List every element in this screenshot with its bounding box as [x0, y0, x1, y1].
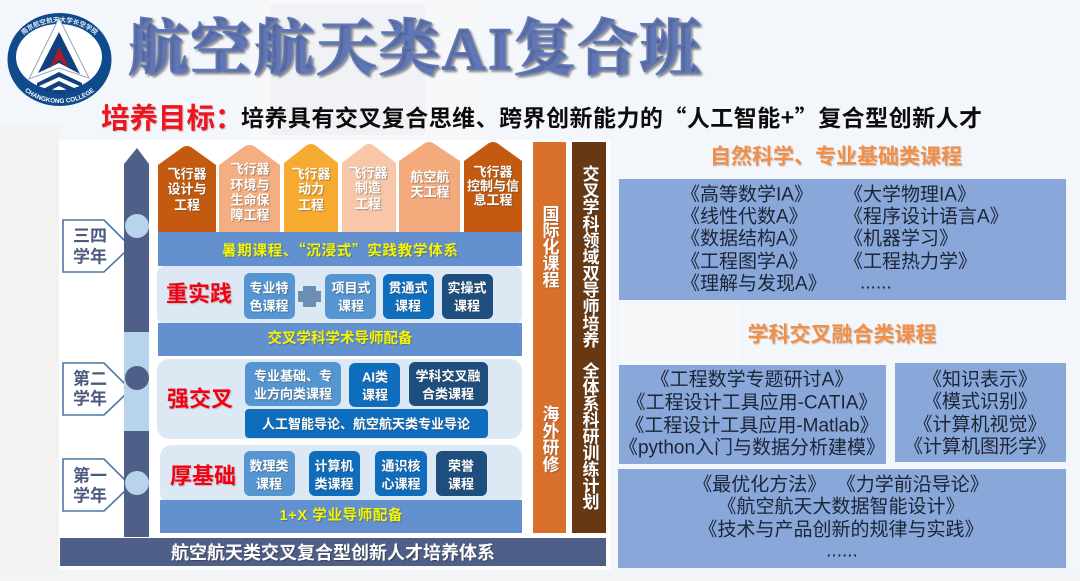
chip: foundation courses — [245, 362, 341, 406]
major: control and information: 飞行器 — [473, 164, 513, 180]
year label: third and fourth: 学年 — [73, 246, 107, 266]
year label: first: 学年 — [73, 486, 107, 506]
chip: through courses: 课程 — [395, 298, 421, 314]
year label: third and fourth: 三四 — [73, 226, 107, 246]
panel: emphasize practice — [157, 266, 522, 324]
chip: project courses: 课程 — [338, 298, 364, 314]
panel: engineering course list: 《工程数学专题研讨A》 — [651, 368, 853, 390]
major: control and information: 控制与信 — [467, 178, 519, 194]
panel: engineering course list — [619, 365, 886, 464]
logo: 南京航空航天大学长空学院 — [20, 16, 98, 35]
chip: math and physics: 课程 — [256, 476, 282, 492]
major: propulsion: 工程 — [298, 198, 324, 212]
chip: AI courses — [349, 363, 400, 407]
panel: design course list: 《航空航天大数据智能设计》 — [717, 496, 965, 518]
chip: math and physics: 数理类 — [249, 458, 289, 474]
panel: AI course list: 《计算机视觉》 — [913, 414, 1047, 436]
major: propulsion: 动力 — [298, 182, 324, 196]
bar: academic mentors: 交叉学科学术导师配备 — [268, 329, 413, 347]
chip: introduction courses: 人工智能导论、航空航天类专业导论 — [262, 416, 470, 432]
panel: engineering course list: 《工程设计工具应用-Matlab》 — [625, 414, 879, 436]
major: aircraft design: 工程 — [174, 198, 200, 212]
chip: computer courses: 计算机 — [314, 458, 354, 474]
chip: foundation courses: 专业基础、专 — [254, 368, 332, 384]
panel: emphasize practice: 重实践 — [166, 282, 232, 306]
panel: thick foundation: 厚基础 — [170, 464, 236, 488]
panel: basic course list — [619, 179, 1066, 300]
major: control and information: 息工程 — [473, 192, 513, 208]
panel: design course list: ...... — [826, 540, 858, 562]
year label: third and fourth — [63, 220, 127, 272]
icon: plus — [298, 286, 321, 307]
major: environment: 环境与 — [230, 178, 270, 192]
major: propulsion — [284, 144, 338, 233]
year label: second — [63, 363, 127, 415]
bar: system name — [60, 538, 606, 566]
chip: general courses: 通识核 — [381, 458, 421, 474]
chip: honors courses: 课程 — [448, 476, 474, 492]
panel: AI course list — [895, 363, 1066, 462]
major: propulsion: 飞行器 — [291, 166, 331, 182]
panel: design course list — [618, 469, 1066, 568]
chip: project courses — [325, 274, 376, 319]
heading: interdisciplinary courses: 学科交叉融合类课程 — [748, 322, 936, 346]
timeline spine — [124, 148, 149, 537]
chip: general courses — [375, 451, 427, 496]
chip: interdisciplinary courses: 合类课程 — [422, 386, 474, 402]
chip: AI courses: 课程 — [362, 388, 388, 402]
chip: interdisciplinary courses — [409, 362, 488, 406]
major: environment: 飞行器 — [230, 162, 270, 176]
panel: design course list: 《最优化方法》 《力学前沿导论》 — [693, 474, 989, 496]
chip: hands-on courses: 实操式 — [447, 280, 487, 296]
panel: basic course list: 《数据结构A》 — [681, 228, 808, 250]
panel: engineering course list: 《python入门与数据分析建模》 — [619, 436, 885, 458]
major: aircraft design: 设计与 — [167, 182, 207, 196]
panel: AI course list: 《模式识别》 — [923, 390, 1037, 412]
major: manufacturing: 制造 — [355, 180, 381, 196]
year label: first — [63, 459, 127, 511]
chip: specialty courses: 色课程 — [249, 298, 289, 314]
logo: CHANGKONG COLLEGE — [26, 88, 94, 103]
chip: hands-on courses — [442, 274, 493, 319]
title: 航空航天类AI复合班 — [128, 15, 700, 82]
major: aerospace engineering: 航空航 — [410, 170, 450, 184]
subtitle: training goal — [101, 96, 982, 137]
chip: honors courses: 荣誉 — [448, 458, 474, 474]
logo — [8, 13, 112, 106]
panel: strengthen cross-discipline: 强交叉 — [167, 386, 233, 412]
chip: project courses: 项目式 — [331, 280, 371, 296]
major: environment — [219, 145, 280, 233]
panel: basic course list: 《工程图学A》 — [681, 250, 808, 272]
panel: thick foundation — [160, 445, 522, 505]
panel: strengthen cross-discipline — [157, 359, 522, 439]
major: manufacturing: 工程 — [355, 196, 381, 212]
chip: honors courses — [436, 451, 487, 496]
year label: second: 第二 — [73, 368, 107, 388]
bar: academic mentors — [158, 323, 522, 356]
major: aerospace engineering — [399, 142, 460, 233]
year label: second: 学年 — [73, 388, 107, 408]
panel: basic course list: 《高等数学IA》 — [681, 184, 813, 206]
major: manufacturing: 飞行器 — [348, 166, 388, 180]
panel: design course list: 《技术与产品创新的规律与实践》 — [698, 518, 984, 540]
major: control and information — [464, 142, 522, 233]
chip: through courses: 贯通式 — [388, 280, 428, 296]
major: manufacturing — [342, 144, 396, 233]
bar: summer courses — [158, 232, 522, 266]
major: aircraft design: 飞行器 — [167, 166, 207, 182]
year label: first: 第一 — [73, 466, 107, 486]
chip: math and physics — [244, 451, 295, 496]
panel: AI course list: 《计算机图形学》 — [904, 436, 1056, 458]
panel: engineering course list: 《工程设计工具应用-CATIA》 — [627, 392, 877, 414]
column: dual mentors and research training: 交叉学科领域双导师培养 — [580, 164, 599, 349]
column: international courses: 海外研修 — [540, 405, 559, 472]
column: international courses: 国际化课程 — [540, 205, 559, 289]
chip: introduction courses — [245, 409, 488, 438]
chip: through courses — [383, 274, 434, 319]
subtitle: training goal: 培养目标： — [101, 96, 244, 137]
column: international courses — [533, 142, 566, 533]
panel: basic course list: 《线性代数A》 — [681, 206, 808, 228]
chip: specialty courses: 专业特 — [249, 280, 289, 296]
panel: basic course list: 《大学物理IA》 — [844, 184, 976, 206]
panel: basic course list: 《工程热力学》 — [844, 250, 977, 272]
panel: training system — [59, 140, 610, 570]
panel: AI course list: 《知识表示》 — [923, 368, 1037, 390]
bar: system name: 航空航天类交叉复合型创新人才培养体系 — [171, 542, 495, 563]
panel: basic course list: 《理解与发现A》 — [681, 272, 827, 294]
panel: basic course list: 《程序设计语言A》 — [844, 206, 1009, 228]
chip: computer courses: 类课程 — [314, 476, 354, 492]
chip: specialty courses — [244, 273, 295, 319]
column: dual mentors and research training: 全体系科研训练计划 — [580, 361, 599, 510]
heading: basic courses: 自然科学、专业基础类课程 — [710, 144, 962, 168]
panel: basic course list: 《机器学习》 — [844, 228, 958, 250]
chip: interdisciplinary courses: 学科交叉融 — [415, 368, 481, 384]
major: aerospace engineering: 天工程 — [410, 184, 450, 200]
bar: summer courses: 暑期课程、“沉浸式”实践教学体系 — [222, 240, 458, 260]
panel: basic course list: ...... — [860, 272, 892, 294]
major: aircraft design — [158, 146, 216, 233]
chip: AI courses: AI类 — [362, 370, 388, 384]
chip: general courses: 心课程 — [381, 476, 421, 492]
chip: computer courses — [309, 451, 360, 496]
chip: foundation courses: 业方向类课程 — [254, 386, 332, 402]
bar: academic advisors — [160, 500, 522, 533]
subtitle: training goal: 培养具有交叉复合思维、跨界创新能力的“人工智能+”复合型创新人才 — [241, 99, 982, 133]
bar: academic advisors: 1+X 学业导师配备 — [280, 506, 403, 524]
chip: hands-on courses: 课程 — [454, 298, 480, 314]
major: environment: 生命保 — [230, 192, 270, 208]
major: environment: 障工程 — [230, 208, 270, 222]
column: dual mentors and research training — [572, 142, 606, 533]
